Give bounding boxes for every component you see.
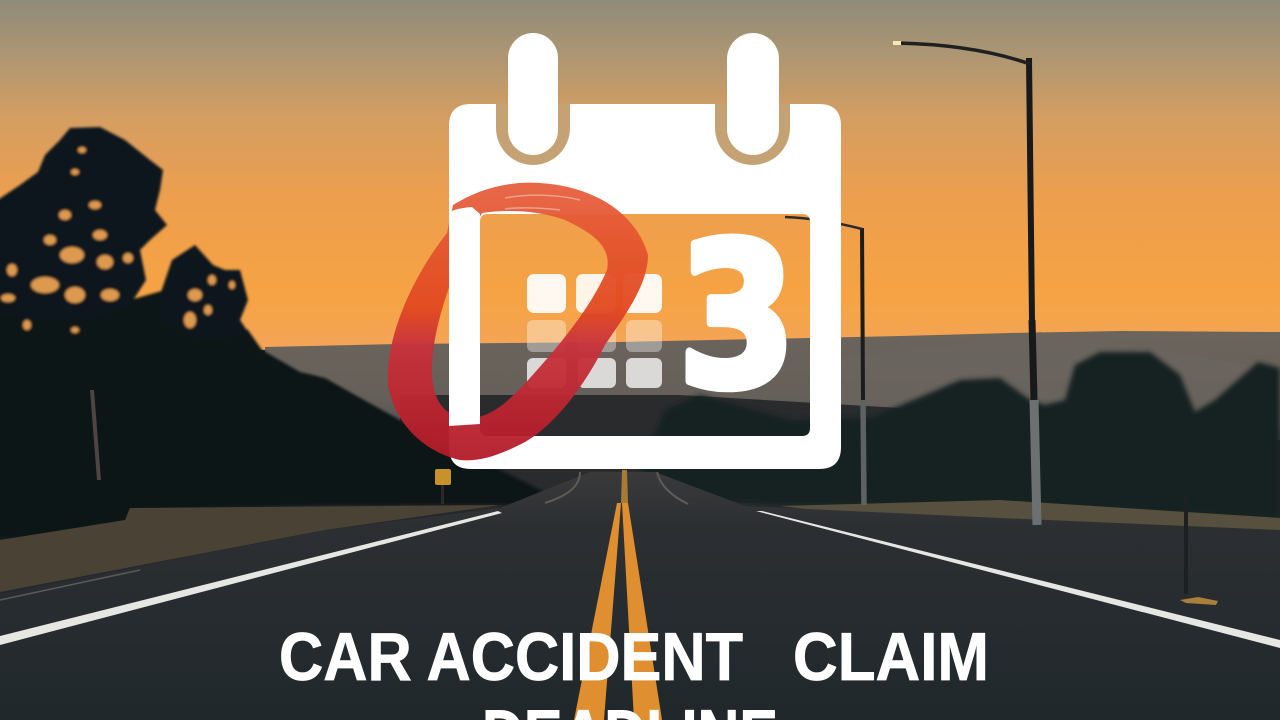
background: sunset sky bbox=[0, 0, 1280, 350]
road shoulder faint line bbox=[0, 570, 140, 600]
street lamp: right large bbox=[893, 41, 1037, 525]
calendar icon bbox=[449, 33, 841, 469]
background: distant hills bbox=[265, 331, 1280, 440]
title: car accident claim deadline: CAR ACCIDENT bbox=[279, 619, 743, 695]
title: car accident claim deadline bbox=[279, 619, 989, 720]
calendar ring: left bbox=[496, 33, 570, 165]
road centre double yellow line bbox=[574, 470, 662, 720]
distant road curves bbox=[545, 472, 688, 504]
background: right roadside ground bbox=[780, 500, 1280, 532]
tree trunk bbox=[90, 390, 101, 480]
red brush circle bbox=[388, 183, 648, 460]
tree crown: small trees bbox=[160, 245, 250, 340]
sky gaps in foliage bbox=[1, 147, 235, 333]
background: left tree line bbox=[0, 127, 560, 540]
road surface bbox=[0, 472, 1280, 720]
background: low dark band behind road bbox=[400, 395, 900, 510]
road edge line: left bbox=[0, 511, 502, 645]
calendar ring: right bbox=[715, 33, 790, 165]
title: car accident claim deadline: CLAIM bbox=[793, 619, 989, 695]
calendar body with window bbox=[449, 104, 841, 469]
calendar left edge bar over brush bbox=[449, 207, 480, 426]
background: left roadside ground bbox=[0, 505, 500, 592]
date numeral: 3 bbox=[678, 201, 796, 432]
background: hill band near horizon bbox=[830, 332, 1280, 430]
road edge line: right bbox=[756, 511, 1280, 648]
street lamp: distant bbox=[785, 217, 864, 505]
background: right tree line bbox=[640, 352, 1280, 518]
date grid squares bbox=[527, 274, 662, 388]
road sign bbox=[435, 469, 451, 504]
tree crown: tall tree bbox=[0, 127, 167, 320]
roadside marker post bbox=[1180, 494, 1218, 605]
tree mass bbox=[0, 290, 560, 540]
brush highlights bbox=[505, 195, 580, 210]
